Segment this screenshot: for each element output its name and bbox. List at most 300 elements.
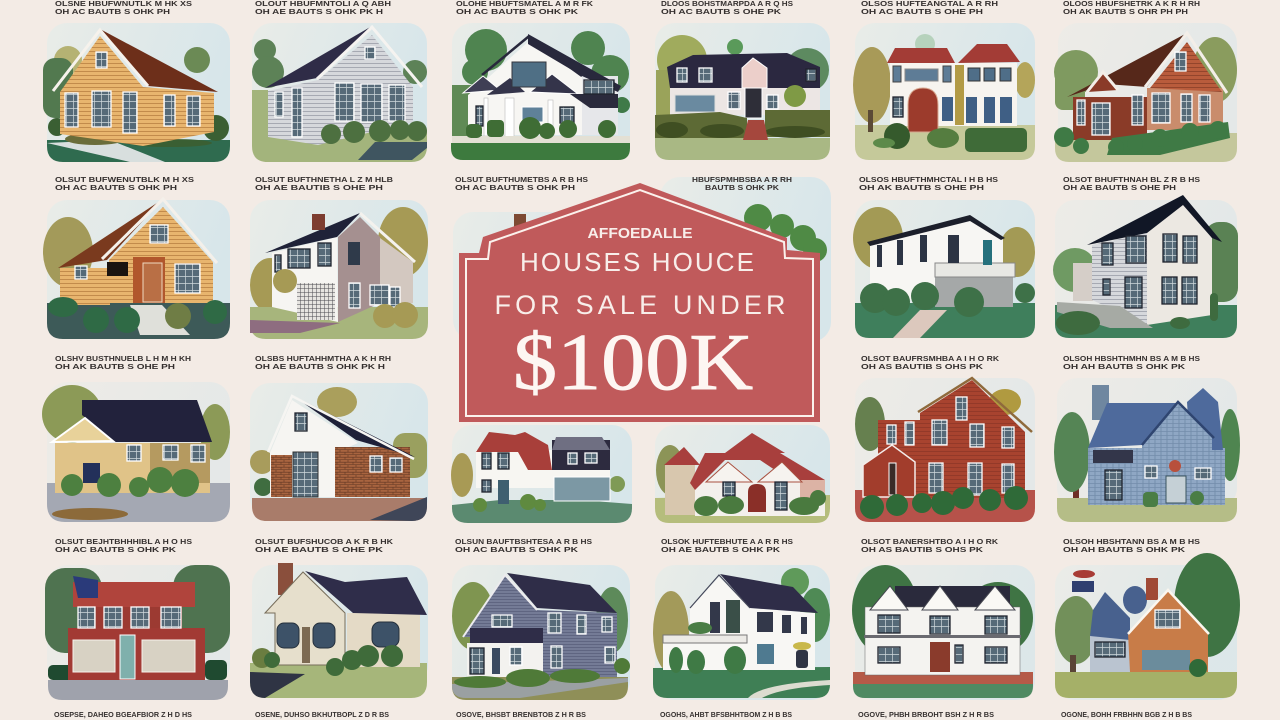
gable trim xyxy=(360,213,415,262)
shop windows xyxy=(73,640,195,672)
white wall xyxy=(272,237,338,322)
house card 14: brick garage house xyxy=(250,383,428,521)
wall xyxy=(55,443,210,493)
sky xyxy=(452,23,630,160)
gable trim xyxy=(1142,402,1214,445)
sign inner border xyxy=(466,190,813,416)
caption xyxy=(1063,354,1200,371)
caption: OH AC BAUTB S OHK PH xyxy=(455,183,575,192)
hedge xyxy=(451,143,630,160)
wall xyxy=(463,575,617,677)
roof edge xyxy=(918,378,1032,432)
tree xyxy=(656,445,684,495)
windows xyxy=(482,453,610,504)
chimney xyxy=(514,214,526,228)
gable trim xyxy=(690,575,750,608)
house card 11: white house with deck xyxy=(853,200,1035,338)
caption: OSENE, DUHSO BKHUTBOPL Z D R BS xyxy=(255,710,389,719)
portico xyxy=(467,628,543,677)
caption: OLSOT BHUFTHNAH BL Z R B HS xyxy=(1063,175,1200,184)
gold column xyxy=(955,65,964,125)
chimney xyxy=(312,214,325,230)
windows xyxy=(1102,234,1197,308)
gables xyxy=(706,462,802,482)
sky xyxy=(47,565,230,685)
roof xyxy=(265,26,372,88)
house card 1: orange cottage xyxy=(43,23,230,162)
house card 12: white siding, black roof xyxy=(1053,195,1238,338)
urn xyxy=(793,642,811,668)
side wall xyxy=(268,80,318,145)
upper wall xyxy=(78,607,182,628)
taupe wall xyxy=(338,217,380,322)
caption: BAUTB S OHK PK xyxy=(705,183,780,192)
roofs xyxy=(887,44,1020,63)
caption: OLSOT BANERSHTBO A I H O RK xyxy=(861,537,999,546)
caption xyxy=(692,175,792,192)
lawn xyxy=(47,140,230,162)
price: $100K xyxy=(513,319,753,407)
sky left xyxy=(453,212,633,340)
house card 3: white modern house xyxy=(451,23,630,160)
gable trim xyxy=(102,199,217,263)
lattice xyxy=(297,283,335,320)
caption: OH AC BAUTB S OHK PH xyxy=(55,183,177,192)
roof xyxy=(895,586,1010,610)
windows xyxy=(878,615,1007,663)
windows xyxy=(887,397,1014,495)
windows xyxy=(275,47,405,137)
trees xyxy=(451,453,625,497)
shrubs xyxy=(61,467,199,497)
caption xyxy=(255,354,391,371)
shrub xyxy=(784,85,806,107)
lawn xyxy=(1055,672,1237,698)
caption: OSOVE, BHSBT BRENBTOB Z H R BS xyxy=(456,710,586,719)
ground xyxy=(252,498,427,521)
caption: OH AE BAUTB S OHE PH xyxy=(1063,183,1176,192)
sky xyxy=(1055,565,1237,700)
caption: OH AC BAUTB S OHE PH xyxy=(861,7,983,16)
door xyxy=(143,263,162,302)
house card 24: orange brick with blue wing xyxy=(1055,553,1240,700)
lawn xyxy=(452,500,632,523)
lower wall xyxy=(68,628,205,680)
caption xyxy=(661,537,793,554)
walk xyxy=(452,136,630,144)
caption: OLSHV BUSTHNUELB L H M H KH xyxy=(55,354,191,363)
red door xyxy=(748,484,766,512)
stone front xyxy=(265,572,345,665)
front wall xyxy=(109,207,213,303)
caption: OH AE BAUTB S OHK PK xyxy=(661,545,781,554)
caption xyxy=(55,0,192,16)
caption: HBUFSPMHBSBA A R RH xyxy=(692,175,792,184)
caption xyxy=(1063,0,1200,16)
sky xyxy=(655,565,830,700)
caption row 4 xyxy=(55,537,1200,554)
caption: OH AS BAUTIB S OHS PK xyxy=(861,362,984,371)
caption: OH AC BAUTB S OHK PK xyxy=(55,545,177,554)
caption: OGOVE, PHBH BRBOHT BSH Z H R BS xyxy=(858,710,994,719)
roof xyxy=(1088,388,1223,450)
caption: OLSOK HUFTEBHUTE A A R R HS xyxy=(661,537,793,546)
pink gable xyxy=(742,58,767,88)
low wing xyxy=(1073,263,1093,301)
caption: OLSOH HBSHTHMHN BS A M B HS xyxy=(1063,354,1200,363)
roof xyxy=(58,199,163,268)
right wing xyxy=(582,76,618,135)
lawn xyxy=(47,303,230,339)
caption: OH AK BAUTB S OHE PH xyxy=(55,362,175,371)
door xyxy=(745,88,762,118)
door xyxy=(83,463,100,483)
caption xyxy=(255,175,394,192)
shrubs xyxy=(454,658,630,688)
sky xyxy=(655,23,830,160)
lawn xyxy=(653,667,830,698)
caption xyxy=(1063,175,1200,192)
house card 19: red two-storey shop xyxy=(45,565,230,700)
trees xyxy=(42,385,230,460)
sky xyxy=(250,200,428,339)
caption: OLSBS HUFTAHHMTHA A K H RH xyxy=(255,354,391,363)
caption xyxy=(861,0,998,16)
drive xyxy=(250,320,340,333)
stone xyxy=(150,443,210,483)
bush xyxy=(1189,659,1207,677)
ground xyxy=(47,483,230,522)
left wall xyxy=(60,268,110,305)
small gable xyxy=(1087,72,1118,92)
lawn xyxy=(1055,133,1237,162)
right wall xyxy=(380,238,413,307)
caption xyxy=(456,0,594,16)
trees xyxy=(1054,409,1240,498)
lawn xyxy=(250,307,428,339)
caption row 5 xyxy=(54,710,1192,719)
house card 13: yellow bungalow xyxy=(42,382,230,522)
sky xyxy=(855,200,1035,338)
bush xyxy=(254,478,272,496)
caption: OH AE BAUTB S OHK PK H xyxy=(255,362,385,371)
trees xyxy=(43,46,210,118)
shrubs xyxy=(321,120,427,144)
lower storey xyxy=(935,277,1013,307)
windows xyxy=(275,242,400,308)
trees xyxy=(853,207,1035,277)
house card 23: white gabled estate xyxy=(852,565,1035,700)
porch gable xyxy=(863,445,915,497)
caption xyxy=(455,175,588,192)
windows xyxy=(492,613,615,668)
stairs xyxy=(130,305,190,335)
log xyxy=(52,508,128,520)
roof xyxy=(507,573,617,613)
upper windows xyxy=(78,607,181,628)
windows xyxy=(476,62,614,126)
walls xyxy=(665,465,825,516)
caption: OSEPSE, DAHEO BGEAFBIOR Z H D HS xyxy=(54,710,192,719)
sky xyxy=(47,23,230,162)
roof xyxy=(1087,195,1222,245)
flag xyxy=(73,576,98,598)
front wall xyxy=(1147,200,1212,325)
caption: OH AE BAUTB S OHE PK xyxy=(255,545,384,554)
caption: OH AK BAUTB S OHR PH PH xyxy=(1063,7,1188,16)
house card 22: white house, navy roof xyxy=(653,565,830,700)
garage door xyxy=(293,452,318,497)
title line 1: AFFOEDALLE xyxy=(588,225,692,242)
blue wing xyxy=(1090,586,1147,672)
lawn xyxy=(655,138,830,160)
house card 16: white house with red gables xyxy=(655,425,830,523)
storefront sign xyxy=(1093,450,1133,463)
side wall xyxy=(143,87,214,146)
driveway xyxy=(250,672,305,698)
caption xyxy=(455,537,592,554)
caption: OH AC BAUTB S OHE PK xyxy=(661,7,782,16)
ground xyxy=(452,677,628,700)
sign body xyxy=(459,183,820,422)
caption: OH AK BAUTB S OHE PH xyxy=(859,183,984,192)
steps xyxy=(743,120,768,140)
front wall xyxy=(318,35,413,145)
caption: OH AS BAUTIB S OHS PK xyxy=(861,545,984,554)
windows xyxy=(675,68,816,112)
door frame xyxy=(133,257,165,303)
caption: OH AE BAUTIB S OHE PH xyxy=(255,183,383,192)
chimney xyxy=(1092,385,1109,420)
walls xyxy=(476,450,610,488)
trees xyxy=(853,34,1035,132)
door xyxy=(930,642,950,672)
roof xyxy=(73,582,195,607)
gable xyxy=(52,418,113,442)
roof xyxy=(1067,33,1187,97)
lower walls xyxy=(1073,88,1223,140)
sky right xyxy=(660,177,831,342)
lawn xyxy=(855,303,1035,338)
caption xyxy=(661,0,793,16)
bushes xyxy=(860,486,1028,519)
roof xyxy=(265,213,360,253)
windows xyxy=(723,482,787,510)
front gable wall xyxy=(1150,42,1222,92)
shrubs xyxy=(466,117,616,139)
sky xyxy=(655,425,830,523)
windows xyxy=(1077,52,1210,135)
caption: OLSUT BUFSHUCOB A K R B HK xyxy=(255,537,394,546)
flag xyxy=(1072,570,1095,592)
roof xyxy=(667,53,820,88)
bushes xyxy=(860,282,1035,317)
chimney xyxy=(1146,578,1158,600)
house card 20: stone cottage xyxy=(250,563,428,698)
trees xyxy=(45,565,230,680)
sky xyxy=(855,23,1035,160)
caption: OLSUN BAUFTBSHTESA A R B HS xyxy=(455,537,592,546)
tree xyxy=(252,39,427,88)
ground xyxy=(855,490,1035,522)
door xyxy=(120,635,135,679)
left wall xyxy=(1092,233,1147,325)
hedges xyxy=(1054,121,1230,155)
ground xyxy=(48,680,228,700)
bushes xyxy=(48,115,229,147)
storefront xyxy=(1105,460,1211,503)
sky xyxy=(452,425,632,523)
caption: OLSUT BUFWENUTBLK M H XS xyxy=(55,175,194,184)
caption row 2 xyxy=(55,175,1200,192)
trees xyxy=(852,565,1033,655)
roof xyxy=(100,29,218,92)
arched door xyxy=(908,88,938,132)
porch line xyxy=(864,635,1021,638)
roof xyxy=(867,215,1005,246)
house card 7: yellow wood bungalow xyxy=(43,199,230,339)
caption: OLSOS HBUFTHMHCTAL I H B HS xyxy=(859,175,998,184)
windows xyxy=(295,413,402,472)
curved path xyxy=(748,680,830,698)
house card 17: red brick colonial xyxy=(855,378,1035,522)
house card 18: blue storefront house xyxy=(1054,378,1240,522)
title line 2: HOUSES HOUCE xyxy=(520,247,754,277)
house card 21: blue-grey siding house xyxy=(452,565,630,700)
sky xyxy=(855,378,1035,508)
sky xyxy=(250,383,428,518)
lawn xyxy=(855,125,1035,160)
windows xyxy=(1095,610,1190,670)
lawn xyxy=(1057,498,1237,522)
caption: OH AC BAUTB S OHK PK xyxy=(456,7,579,16)
sky xyxy=(47,382,230,502)
caption: OLSUT BUFTHNETHA L Z M HLB xyxy=(255,175,394,184)
walls xyxy=(870,218,1003,300)
bushes xyxy=(48,297,227,333)
trees xyxy=(656,35,829,115)
gable xyxy=(1142,403,1212,505)
windows xyxy=(893,66,1012,123)
house cards 9 and 10 behind the sign xyxy=(453,177,831,342)
gable trim xyxy=(1128,590,1209,634)
walls xyxy=(468,42,582,135)
brick wall xyxy=(1128,590,1208,672)
path xyxy=(47,140,165,162)
path xyxy=(893,310,947,338)
trees xyxy=(855,389,1021,451)
shrubs xyxy=(694,490,826,516)
caption xyxy=(859,175,998,192)
hedges xyxy=(655,110,830,138)
porch gables xyxy=(463,74,618,108)
caption row 1 xyxy=(55,0,1200,16)
house card 15: small white house with red roof xyxy=(451,425,632,523)
sky xyxy=(1058,23,1237,160)
windows xyxy=(65,52,200,133)
house card 4: navy roof manor xyxy=(655,23,830,160)
shrubs xyxy=(473,494,546,512)
gable trim xyxy=(317,27,422,87)
caption: OH AC BAUTB S OHK PK xyxy=(455,545,579,554)
white wall xyxy=(270,400,358,497)
bushes xyxy=(1143,491,1204,507)
lawn xyxy=(853,684,1033,698)
roof xyxy=(82,400,212,442)
driveway xyxy=(358,142,427,160)
shrubs xyxy=(873,123,1027,152)
lawn xyxy=(250,663,427,698)
fascia xyxy=(268,396,414,459)
caption: OH AH BAUTB S OHK PK xyxy=(1063,545,1186,554)
roof xyxy=(305,571,427,615)
caption xyxy=(55,354,191,371)
title sign xyxy=(459,183,820,422)
walls xyxy=(663,577,815,670)
tree xyxy=(43,217,93,287)
chimney xyxy=(278,563,293,595)
caption xyxy=(861,354,1000,371)
caption xyxy=(55,175,194,192)
sky xyxy=(452,565,630,700)
roofs xyxy=(476,432,610,470)
tree xyxy=(744,204,827,262)
shrubs xyxy=(273,269,418,328)
lawn xyxy=(655,495,830,523)
lower wall xyxy=(670,88,820,115)
sky xyxy=(252,565,428,685)
windows xyxy=(75,225,200,293)
caption: OLSUT BUFTHUMETBS A R B HS xyxy=(455,175,588,184)
caption: OH AE BAUTS S OHK PK H xyxy=(255,7,383,16)
trees xyxy=(1054,37,1237,110)
sky xyxy=(1057,378,1237,508)
sky xyxy=(855,565,1035,700)
walkway xyxy=(452,678,628,698)
roof xyxy=(720,574,818,613)
right wall xyxy=(347,613,420,667)
caption xyxy=(255,537,394,554)
gables xyxy=(870,586,1015,610)
porch xyxy=(107,262,128,276)
hedge xyxy=(1056,293,1218,335)
roofs xyxy=(664,433,825,490)
lawn xyxy=(252,90,427,162)
door xyxy=(302,627,310,663)
caption xyxy=(1063,537,1200,554)
left wing xyxy=(878,420,920,497)
title line 3: FOR SALE UNDER xyxy=(494,290,786,320)
caption: OGOHS, AHBT BFSBHHTBOM Z H B BS xyxy=(660,710,792,719)
roof xyxy=(292,395,415,457)
trees xyxy=(452,29,630,140)
windows xyxy=(877,235,992,267)
gable trim xyxy=(463,575,537,637)
steps xyxy=(1057,302,1153,328)
sky xyxy=(1055,200,1237,338)
deck rail xyxy=(935,263,1015,277)
caption row 3 xyxy=(55,354,1200,371)
sky xyxy=(252,23,427,162)
caption xyxy=(255,0,391,16)
house card 8: grey and white two-storey xyxy=(250,200,428,339)
walls xyxy=(1088,448,1225,505)
main roof xyxy=(528,34,621,92)
front wall xyxy=(60,36,143,146)
windows xyxy=(710,600,807,664)
main wall xyxy=(920,380,1025,498)
caption xyxy=(861,537,999,554)
